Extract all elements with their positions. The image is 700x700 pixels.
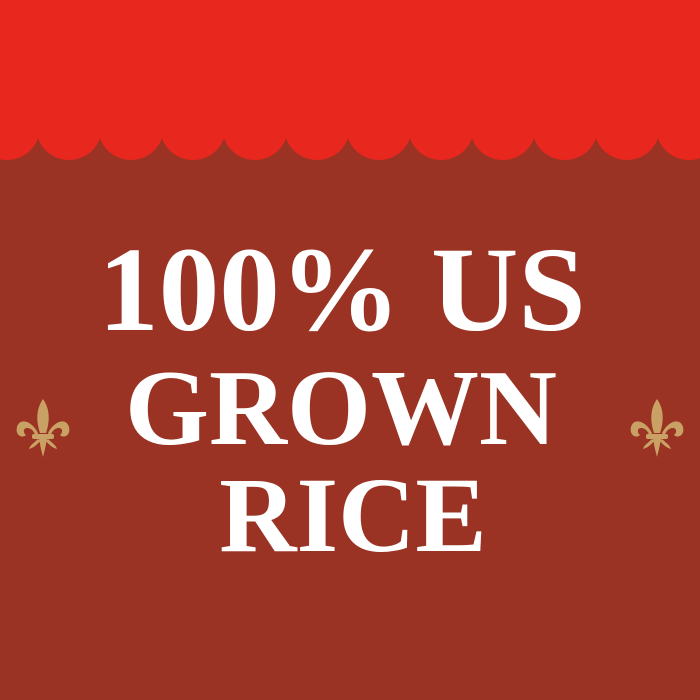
headline: GROWN: GROWN (125, 349, 557, 468)
icon: fleur-de-lis left (16, 399, 70, 457)
headline: RICE: RICE (219, 457, 487, 575)
icon: fleur-de-lis right (630, 399, 684, 457)
headline: 100% US: 100% US (98, 223, 586, 357)
banner: scalloped red awning (0, 0, 700, 160)
